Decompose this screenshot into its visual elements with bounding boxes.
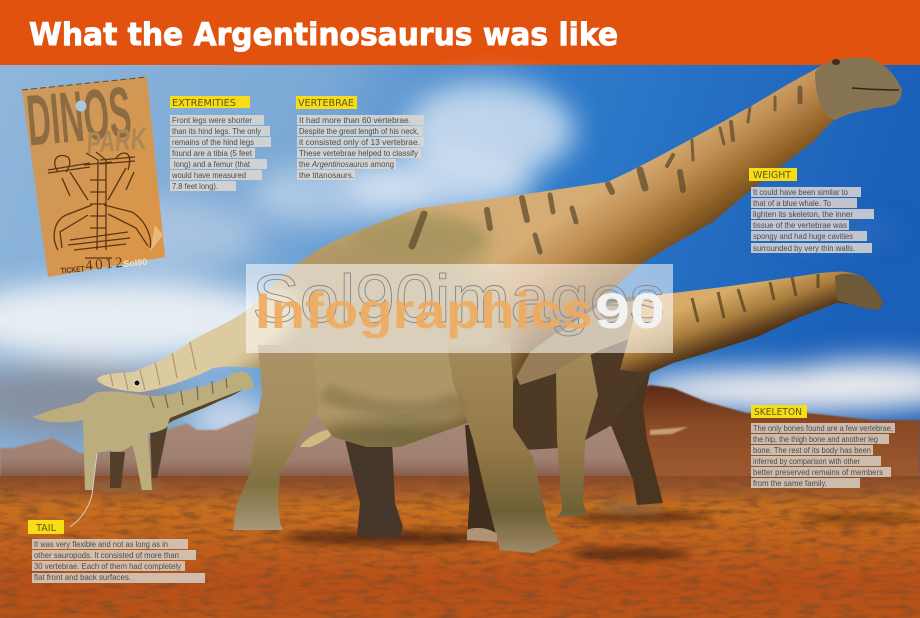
body text: These vertebrae helped to classify (299, 148, 419, 158)
ground shadows (280, 512, 920, 560)
neck (620, 272, 883, 373)
body text: the Argentinosaurus among (299, 159, 394, 169)
body text: The only bones found are a few vertebrae, (753, 423, 893, 433)
body text: 7.8 feet long). (172, 181, 218, 191)
body text: found are a tibia (5 feet (172, 148, 253, 158)
foot highlight (467, 528, 497, 542)
far hind leg (345, 440, 403, 537)
ticket: Dinos Park: TICKET (60, 264, 85, 275)
watermark: 90 (595, 283, 665, 339)
neck stripes (692, 274, 818, 322)
ticket: Dinos Park: 4012 (85, 255, 126, 274)
body text: Despite the great length of his neck, (299, 126, 419, 136)
body text (751, 187, 874, 253)
body text: other sauropods. It consisted of more than (34, 550, 179, 560)
head (815, 58, 902, 120)
body text: from the same family. (753, 478, 827, 488)
torso tone (230, 230, 510, 450)
dinosaur: main (64, 50, 910, 553)
label: TAIL (35, 523, 57, 534)
far legs (110, 424, 168, 488)
body, neck and tail (97, 65, 835, 447)
body (480, 293, 680, 450)
ground (0, 476, 920, 618)
near leg (556, 352, 598, 517)
tail stripes (110, 342, 196, 390)
label: WEIGHT (753, 170, 791, 181)
tail marker dot (134, 380, 140, 386)
body text: than its hind legs. The only (172, 126, 262, 136)
watermark: Infographics (255, 283, 593, 339)
dinosaur: rear large (480, 272, 883, 517)
section: skeleton (751, 405, 895, 488)
body text: It could have been similar to (753, 187, 848, 197)
body text: tissue of the vertebrae was (753, 220, 847, 230)
mouth and eye (852, 88, 899, 90)
neck stripes (150, 378, 227, 408)
section: weight (749, 168, 874, 253)
near hind leg (233, 345, 318, 530)
neck stripes (412, 88, 800, 252)
body text: It had more than 60 vertebrae. (299, 115, 411, 125)
body text: it consisted only of 13 vertebrae. (299, 137, 420, 147)
body text: that of a blue whale. To (753, 198, 831, 208)
section: tail (28, 520, 205, 583)
far front leg (465, 425, 503, 540)
ticket: Dinos Park: DINOS (24, 73, 134, 161)
neck underside (168, 390, 242, 424)
body text (297, 115, 424, 180)
body text: the hip, the thigh bone and another leg (753, 434, 878, 444)
body text (170, 115, 271, 191)
small rear tail pieces (300, 400, 460, 447)
label: VERTEBRAE (298, 98, 354, 109)
skeleton sketch (48, 152, 150, 258)
body text: It was very flexible and not as long as in (34, 539, 168, 549)
body text: surrounded by very thin walls. (753, 243, 855, 253)
ticket: Dinos Park (22, 71, 165, 277)
tail pointer line (70, 453, 97, 527)
distant hills (0, 385, 920, 482)
body text: 30 vertebrae. Each of them had completely (34, 561, 182, 571)
body text (751, 423, 895, 488)
far leg (600, 373, 663, 505)
header bar (0, 0, 920, 65)
dust clouds (85, 480, 664, 515)
title: What the Argentinosaurus was like (29, 17, 618, 53)
body text: long) and a femur (that (174, 159, 251, 169)
label: EXTREMITIES (172, 98, 236, 109)
watermark: Sol90images (252, 261, 665, 337)
label: SKELETON (754, 407, 802, 418)
sky background (0, 65, 920, 490)
near front leg (447, 345, 560, 553)
head (835, 274, 883, 310)
section: extremities (170, 96, 271, 191)
body text: would have measured (171, 170, 246, 180)
body text: the titanosaurs. (299, 170, 354, 180)
body text: remains of the hind legs (172, 137, 254, 147)
body and neck (33, 372, 253, 490)
label (28, 520, 64, 534)
tail tone (97, 285, 302, 392)
section: vertebrae (296, 96, 424, 180)
body text: Front legs were shorter (172, 115, 252, 125)
body text (32, 539, 205, 583)
body text: bone. The rest of its body has been (753, 445, 871, 455)
body text: spongy and had huge cavities (753, 231, 853, 241)
dinosaur: distant left (33, 372, 253, 490)
belly crease (318, 385, 466, 418)
ticket: Dinos Park: Sol90 (123, 257, 148, 269)
body text: lighten its skeleton, the inner (753, 209, 853, 219)
body text: inferred by comparison with other (753, 456, 860, 466)
body text: flat front and back surfaces. (34, 572, 131, 582)
ticket: Dinos Park: PARK (85, 122, 149, 160)
body text: better preserved remains of members (753, 467, 883, 477)
